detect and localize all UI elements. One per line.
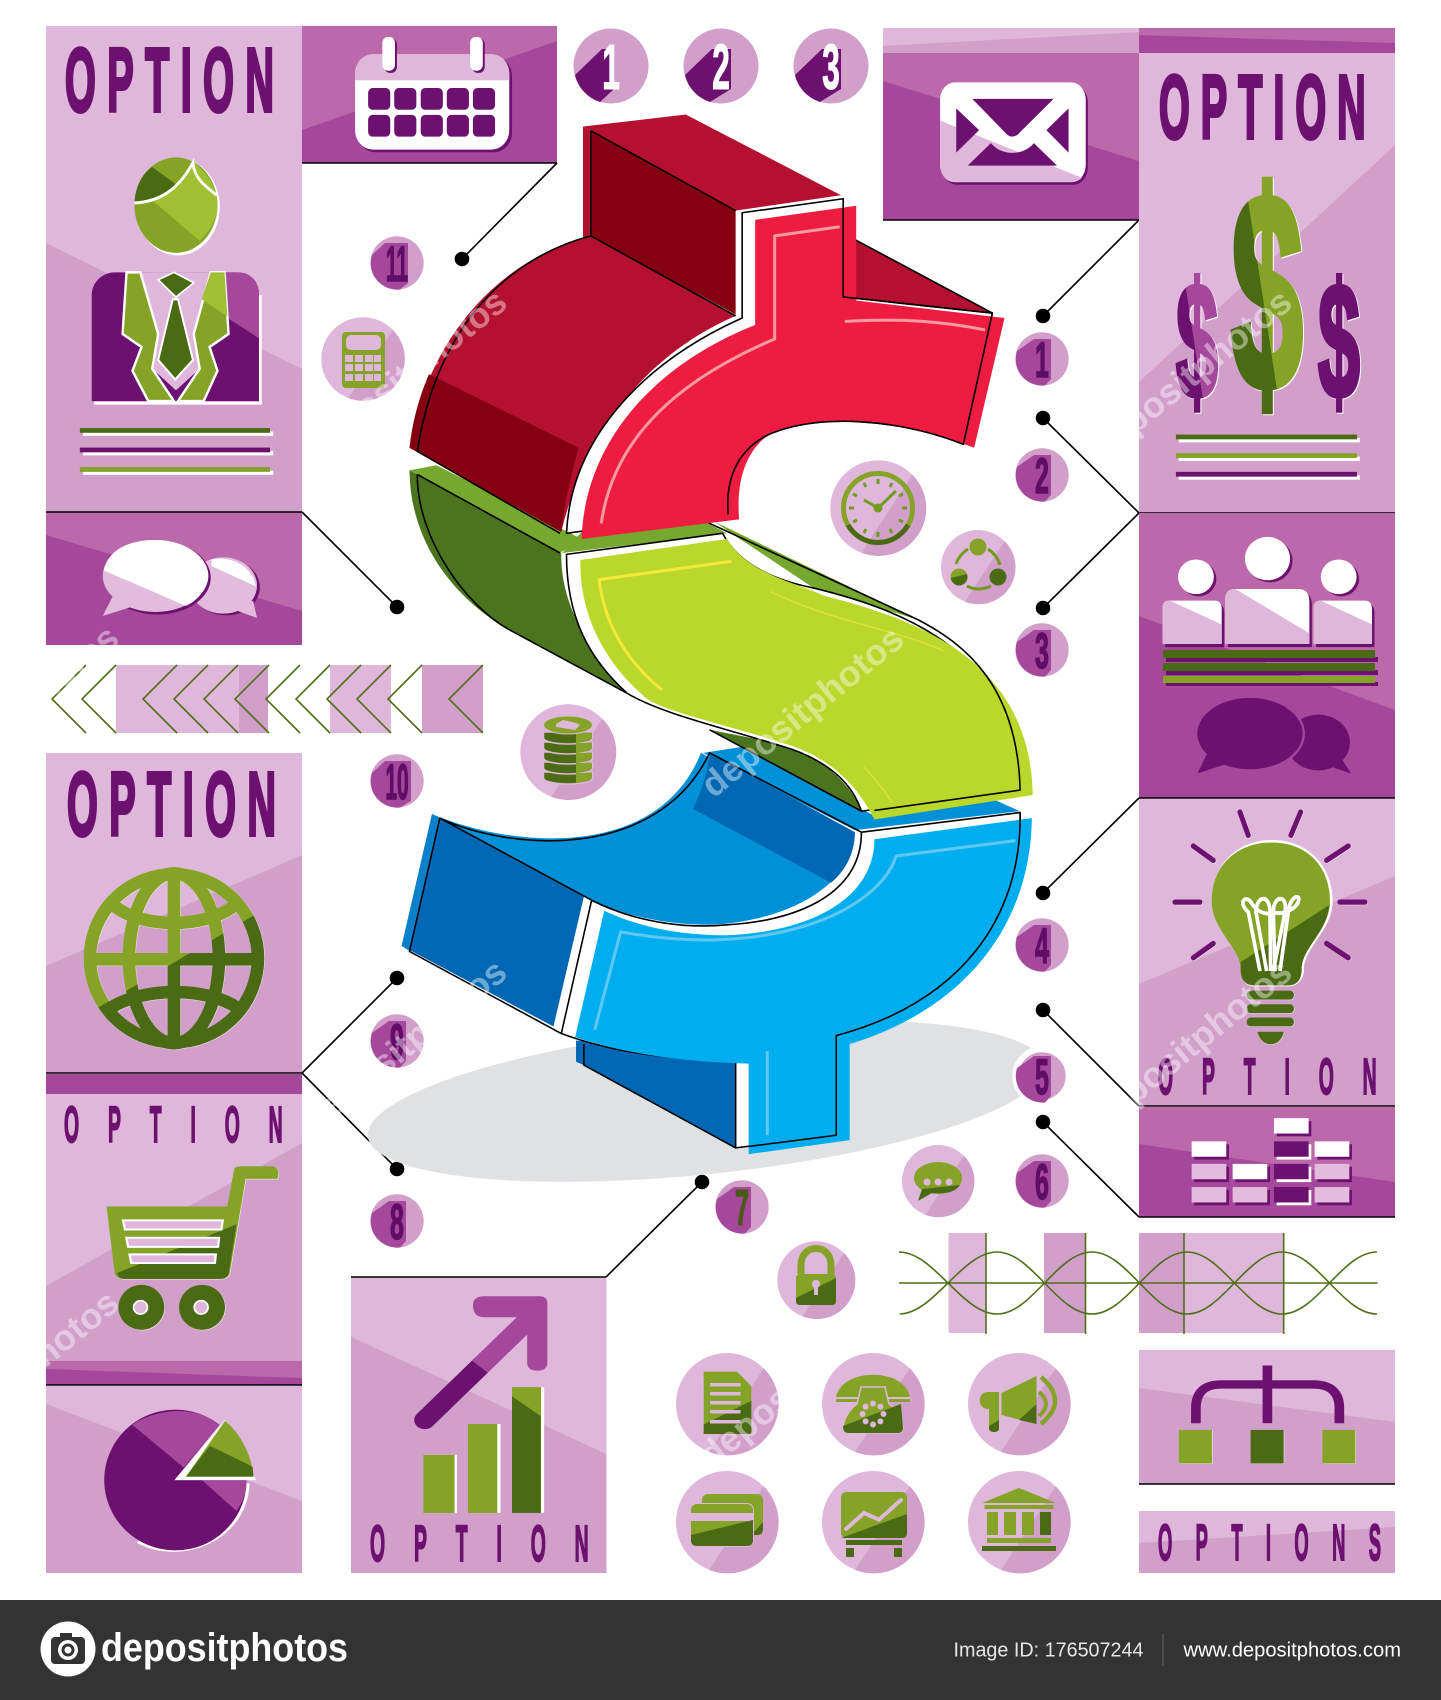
panel: envelope bbox=[883, 28, 1139, 220]
icon: pie chart bbox=[104, 1410, 256, 1550]
heading: option: OPTION bbox=[67, 753, 287, 854]
icon: calendar bbox=[355, 37, 512, 152]
icon: light bulb bbox=[1175, 812, 1365, 1044]
badge: number 10 bbox=[370, 754, 424, 811]
badge: number 1 bbox=[1015, 332, 1069, 388]
panel: globe option bbox=[46, 753, 302, 1073]
icon: credit cards bbox=[676, 1471, 779, 1573]
wave band bbox=[899, 1233, 1378, 1334]
dollar section: green middle bbox=[409, 465, 1033, 820]
website url: www.depositphotos.com bbox=[1182, 1640, 1401, 1662]
badge: top number 3 bbox=[794, 28, 868, 104]
icon: shopping cart bbox=[107, 1166, 279, 1330]
heading: option: OPTION bbox=[65, 29, 285, 130]
stacked lines bbox=[1163, 650, 1378, 686]
icon: three dollar signs: $ bbox=[1176, 250, 1218, 434]
panel: pie chart bbox=[46, 1386, 302, 1573]
footer logo text: depositphotos bbox=[101, 1626, 348, 1670]
image id: Image ID: 176507244 bbox=[954, 1640, 1144, 1662]
panel: light bulb option bbox=[1139, 799, 1406, 1106]
badge: number 2 bbox=[1015, 448, 1069, 504]
panel: calendar bbox=[302, 26, 557, 163]
footer logo icon bbox=[40, 1622, 96, 1676]
badge: number 3: 3 bbox=[1035, 624, 1049, 679]
panel: equalizer bars bbox=[1139, 1107, 1395, 1217]
badge: number 11 bbox=[370, 236, 424, 293]
icon: growth arrow and bars bbox=[423, 1296, 547, 1513]
icon: purple speech bubbles bbox=[1195, 696, 1351, 774]
icon: three dollar signs: $ bbox=[1231, 137, 1303, 449]
badge: top number 1 bbox=[574, 28, 648, 104]
watermark: depositphotos bbox=[1081, 280, 1299, 468]
icon: three dollar signs bbox=[1176, 137, 1360, 449]
badge: number 4: 4 bbox=[1035, 919, 1049, 974]
badge: number 8 bbox=[370, 1194, 424, 1250]
heading: option: OPTION bbox=[1158, 1049, 1406, 1106]
badge: top number 3: 3 bbox=[822, 31, 840, 103]
icon: bar blocks bbox=[1192, 1118, 1352, 1205]
icon: clock bbox=[830, 460, 926, 556]
three dimensional dollar sign bbox=[402, 115, 1033, 1154]
footer bar bbox=[0, 1600, 1441, 1700]
panel: shopping cart option bbox=[46, 1074, 312, 1385]
badge: number 1: 1 bbox=[1035, 333, 1049, 388]
badge: number 9: 9 bbox=[390, 1015, 404, 1070]
icon: share network bbox=[941, 530, 1016, 604]
panel: team bbox=[1139, 513, 1395, 798]
text lines bbox=[1176, 435, 1360, 480]
badge: number 2: 2 bbox=[1035, 449, 1049, 504]
panel: businessman option bbox=[46, 26, 302, 512]
panel: growth chart option bbox=[351, 1277, 618, 1573]
heading: options: OPTIONS bbox=[1158, 1515, 1404, 1572]
dollar section: blue base bbox=[402, 746, 1032, 1154]
connector lines and dots bbox=[302, 163, 1139, 1277]
badge: number 7: 7 bbox=[735, 1181, 749, 1236]
badge: number 10: 10 bbox=[385, 755, 409, 811]
watermark: depositphotos bbox=[693, 617, 911, 805]
badge: top number 2: 2 bbox=[712, 31, 730, 103]
badge: number 8: 8 bbox=[390, 1195, 404, 1250]
icon: speech bubbles bbox=[103, 540, 260, 618]
icon: globe bbox=[90, 873, 258, 1043]
badge: number 9 bbox=[370, 1014, 424, 1070]
icon: three dollar signs: $ bbox=[1318, 250, 1360, 434]
dollar section: red top bbox=[409, 115, 1005, 539]
badge: number 4 bbox=[1015, 918, 1069, 974]
icon: coins bbox=[520, 704, 616, 800]
badge: number 11: 11 bbox=[386, 237, 408, 293]
icon: calculator bbox=[321, 317, 405, 401]
watermark: depositphotos bbox=[296, 280, 514, 468]
badge: number 3 bbox=[1015, 623, 1069, 679]
icon: presentation board bbox=[822, 1471, 925, 1573]
panel: dollars option bbox=[1139, 28, 1395, 513]
panel: options label bbox=[1139, 1511, 1404, 1573]
heading: option: OPTION bbox=[1159, 56, 1377, 157]
badge: top number 2 bbox=[684, 28, 758, 104]
badge: number 7 bbox=[715, 1180, 769, 1236]
icon: bank bbox=[968, 1471, 1071, 1573]
icon: hierarchy bbox=[1179, 1365, 1355, 1464]
badge: number 6 bbox=[1015, 1154, 1069, 1210]
icon: envelope bbox=[940, 82, 1088, 185]
panel: chat bubbles bbox=[46, 512, 302, 645]
panel: org chart bbox=[1139, 1350, 1395, 1484]
icon: telephone bbox=[822, 1353, 925, 1455]
heading: option: OPTION bbox=[64, 1097, 312, 1154]
icon: padlock bbox=[777, 1241, 855, 1319]
watermark: depositphotos bbox=[691, 1287, 909, 1475]
badge: number 5: 5 bbox=[1035, 1050, 1049, 1105]
chevron band bbox=[52, 665, 483, 733]
badge: number 5 bbox=[1015, 1049, 1069, 1105]
watermark: depositphotos bbox=[296, 950, 514, 1138]
icon: megaphone bbox=[968, 1353, 1071, 1455]
badge: top number 1: 1 bbox=[602, 31, 620, 103]
watermark: depositphotos bbox=[1081, 950, 1299, 1138]
heading: option: OPTION bbox=[370, 1516, 618, 1573]
watermark bbox=[0, 280, 1299, 1475]
badge: number 6: 6 bbox=[1035, 1155, 1049, 1210]
dollar shadow bbox=[360, 993, 1052, 1209]
icon: team of three bbox=[1163, 537, 1374, 647]
icon: document bbox=[676, 1353, 779, 1455]
icon: businessman bbox=[80, 157, 273, 475]
icon: small chat bbox=[902, 1145, 974, 1217]
